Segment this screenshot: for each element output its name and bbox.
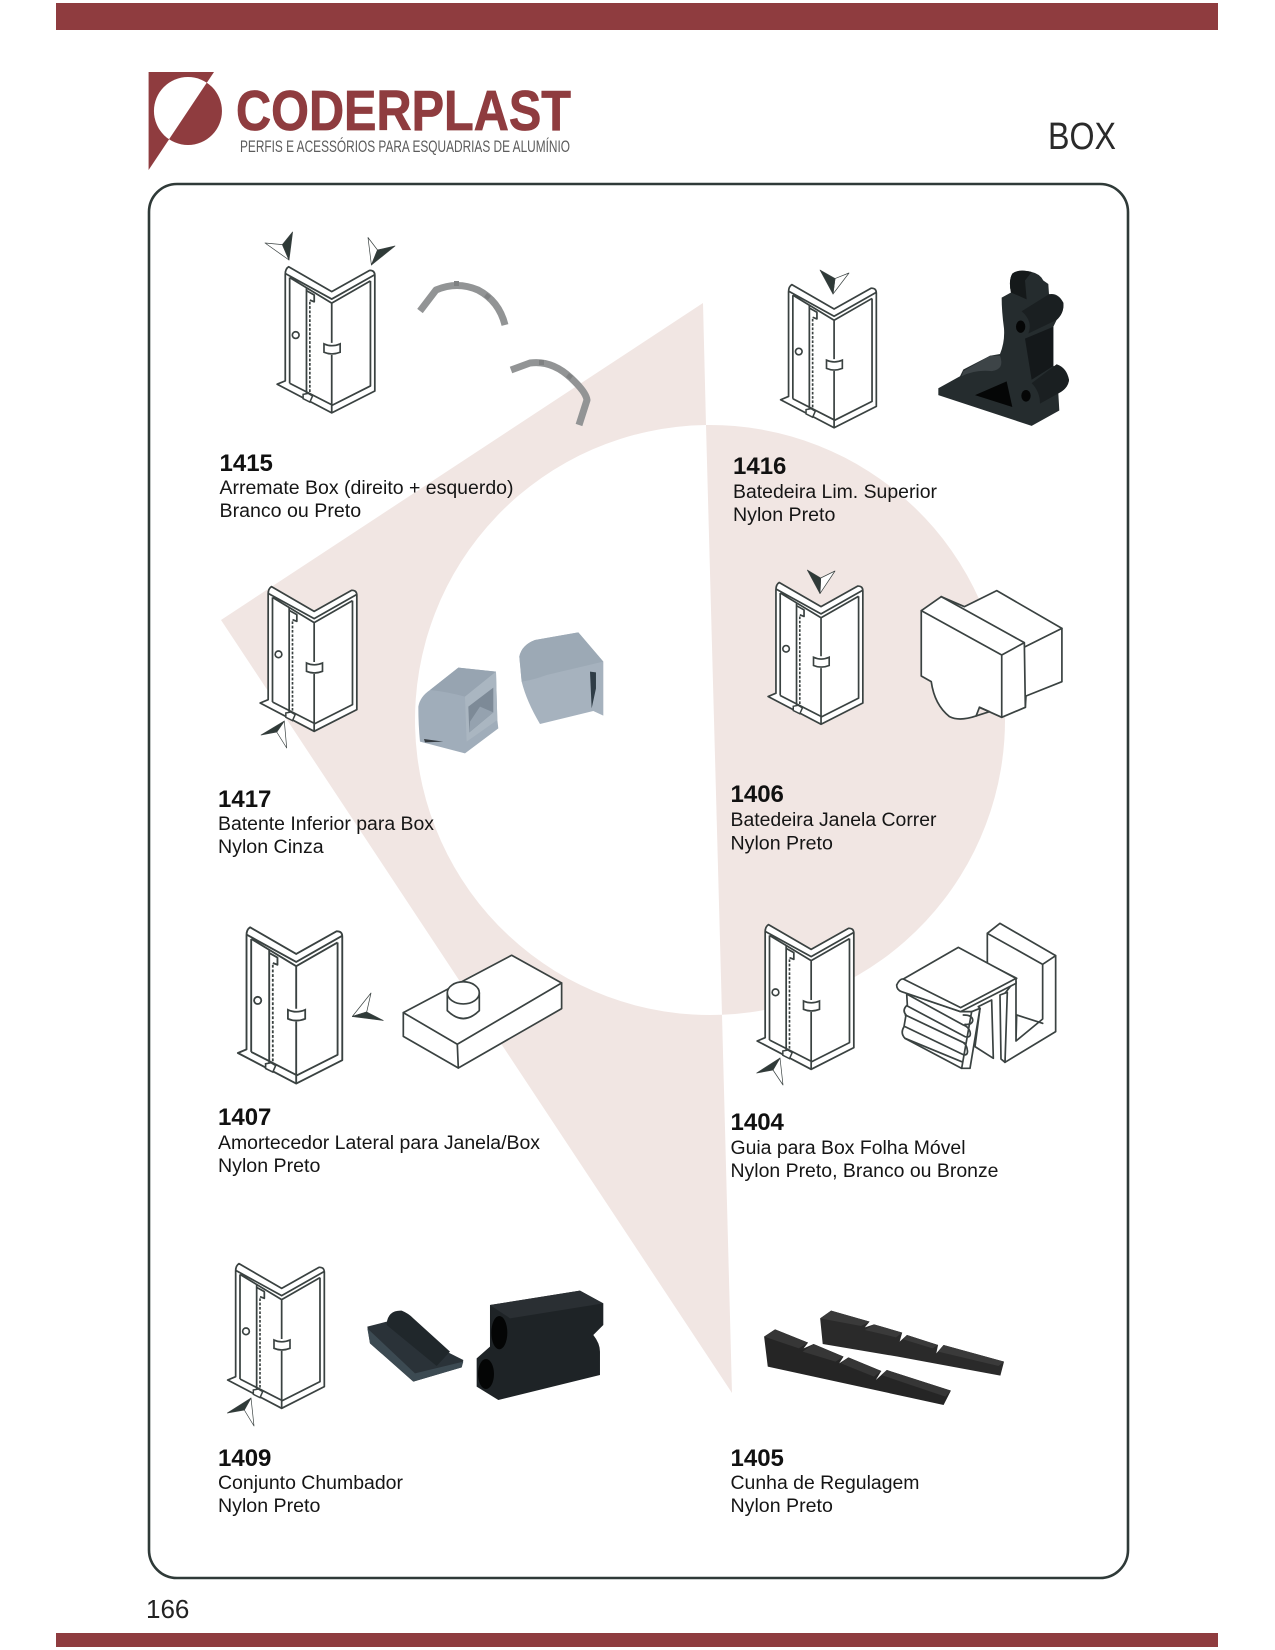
top bar xyxy=(56,3,1218,30)
door diagram xyxy=(768,582,863,724)
part drawing: damper block xyxy=(403,955,562,1068)
label 1409: Nylon Preto xyxy=(218,1495,320,1517)
label 1417 xyxy=(218,786,434,858)
label 1405: Nylon Preto xyxy=(730,1495,833,1517)
label 1415: Branco ou Preto xyxy=(220,500,361,522)
label 1416 xyxy=(733,453,937,526)
section title: BOX xyxy=(1048,116,1116,158)
label 1417: Nylon Cinza xyxy=(218,836,324,858)
logo: Coderplast xyxy=(149,72,571,170)
product 1416 xyxy=(733,270,1069,526)
direction arrow xyxy=(352,993,383,1020)
part drawing: sliding leaf guide xyxy=(897,923,1056,1068)
label 1415: 1415 xyxy=(220,450,273,477)
product 1406 xyxy=(730,570,1062,854)
label 1416: Batedeira Lim. Superior xyxy=(733,481,937,503)
direction arrow xyxy=(820,270,849,294)
direction arrow xyxy=(757,1058,783,1085)
direction arrow xyxy=(227,1398,254,1426)
label 1416: 1416 xyxy=(733,453,786,480)
door diagram xyxy=(757,925,854,1069)
door diagram xyxy=(228,1264,324,1408)
label 1406: Batedeira Janela Correr xyxy=(730,809,937,831)
product 1404 xyxy=(730,923,1056,1182)
label 1409: Conjunto Chumbador xyxy=(218,1472,403,1494)
direction arrow left xyxy=(265,232,293,260)
door diagram xyxy=(260,587,357,731)
label 1404: 1404 xyxy=(730,1109,785,1136)
door diagram xyxy=(277,267,375,413)
label 1405 xyxy=(730,1445,920,1517)
direction arrow xyxy=(261,721,287,748)
page number: 166 xyxy=(146,1594,189,1624)
logo wordmark: CODERPLAST xyxy=(236,79,571,143)
label 1407: 1407 xyxy=(218,1104,271,1131)
product 1407 xyxy=(218,927,562,1177)
label 1416: Nylon Preto xyxy=(733,504,835,526)
label 1404: Nylon Preto, Branco ou Bronze xyxy=(730,1160,999,1182)
direction arrow xyxy=(807,570,835,594)
product 1409 xyxy=(218,1264,603,1517)
label 1407: Amortecedor Lateral para Janela/Box xyxy=(218,1132,540,1154)
label 1407: Nylon Preto xyxy=(218,1155,320,1177)
label 1406: Nylon Preto xyxy=(730,832,833,854)
logo mark xyxy=(149,72,222,170)
label 1415 xyxy=(220,450,514,522)
part photo: black nylon bumper xyxy=(938,271,1069,426)
label 1405: 1405 xyxy=(730,1445,784,1472)
label 1407 xyxy=(218,1104,540,1177)
label 1404: Guia para Box Folha Móvel xyxy=(730,1137,966,1159)
bottom bar xyxy=(56,1633,1218,1647)
logo tagline: PERFIS E ACESSÓRIOS PARA ESQUADRIAS DE ALUMÍNIO xyxy=(240,137,570,156)
part photo: trim arcs xyxy=(420,281,587,425)
label 1415: Arremate Box (direito + esquerdo) xyxy=(220,477,514,499)
label 1409 xyxy=(218,1445,403,1517)
part photo: double-barrel anchor xyxy=(477,1291,603,1400)
main panel frame xyxy=(149,184,1128,1578)
part photo: grey stop open xyxy=(418,668,498,753)
label 1409: 1409 xyxy=(218,1445,271,1472)
product 1405 xyxy=(730,1311,1004,1517)
part photo: levelling wedges xyxy=(764,1311,1004,1405)
product 1417 xyxy=(218,587,603,858)
door diagram xyxy=(781,285,876,428)
label 1417: 1417 xyxy=(218,786,271,813)
product 1415 xyxy=(220,232,587,522)
label 1405: Cunha de Regulagem xyxy=(730,1472,920,1494)
label 1406 xyxy=(730,781,937,854)
watermark logo xyxy=(221,303,1005,1393)
label 1406: 1406 xyxy=(730,781,784,808)
label 1417: Batente Inferior para Box xyxy=(218,813,434,835)
direction arrow right xyxy=(368,238,395,265)
part drawing: striker block xyxy=(921,591,1062,719)
part photo: ribbed anchor base xyxy=(367,1311,463,1382)
part photo: grey stop closed xyxy=(519,632,603,724)
label 1404 xyxy=(730,1109,999,1182)
door diagram xyxy=(238,927,342,1084)
